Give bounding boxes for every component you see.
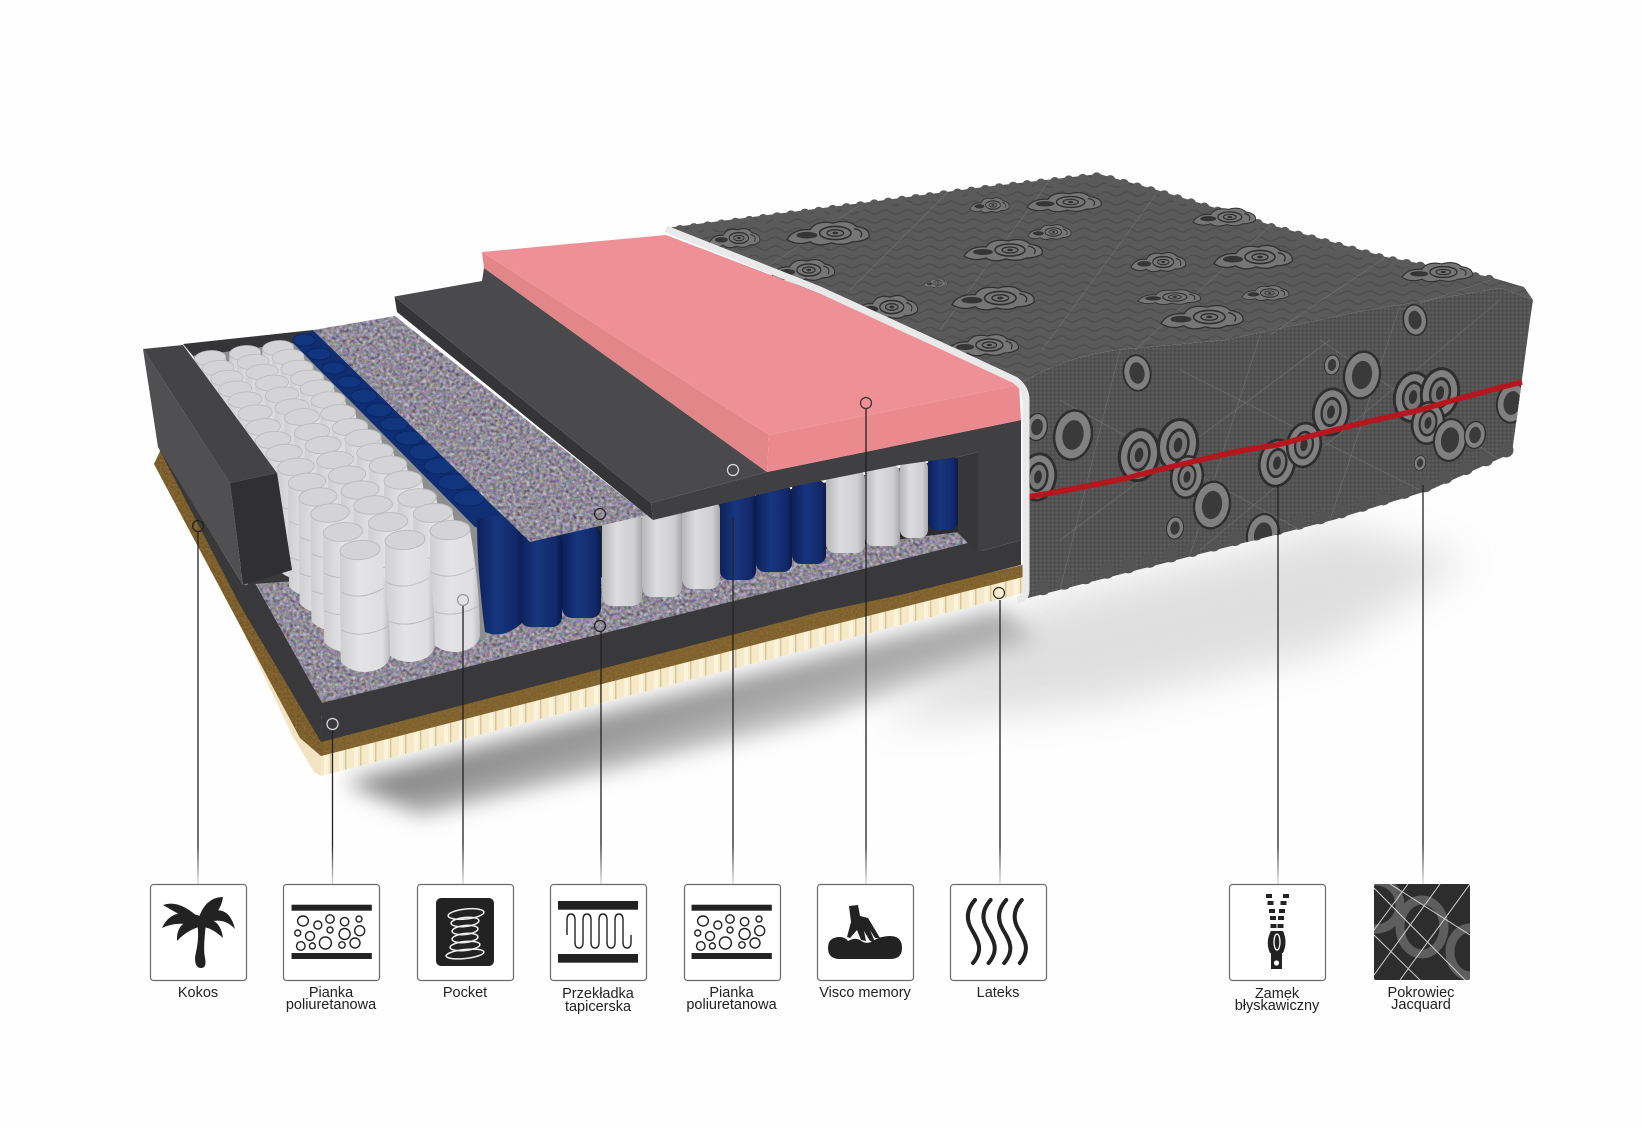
icon: jacquard swatch bbox=[1374, 884, 1470, 980]
pocket springs (front row) bbox=[477, 455, 958, 634]
latex layer bbox=[214, 570, 1023, 776]
card: Visco memory: Visco memory bbox=[819, 985, 912, 1001]
card: Przekładka tapicerska bbox=[550, 884, 646, 1015]
icon: palm tree bbox=[162, 897, 235, 968]
callout lines and markers bbox=[192, 398, 1423, 884]
cover quilting lines bbox=[770, 180, 1500, 590]
felt underlay bbox=[240, 522, 985, 716]
card: Pokrowiec Jacquard: Pokrowiec bbox=[1388, 985, 1454, 1001]
card: Przekładka tapicerska: tapicerska bbox=[565, 999, 632, 1015]
mattress illustration bbox=[143, 174, 1533, 776]
upper polyurethane foam slab bbox=[394, 268, 1021, 552]
floor shadow bbox=[345, 525, 1470, 815]
card: Pianka poliuretanowa: poliuretanowa bbox=[286, 997, 377, 1013]
icon: foam bubbles bbox=[692, 905, 772, 959]
card: Pianka poliuretanowa (upper): Pianka bbox=[709, 985, 755, 1001]
blue pocket band bbox=[293, 330, 530, 542]
pocket springs (grey, side rows) bbox=[194, 340, 480, 672]
card: Pokrowiec Jacquard bbox=[1374, 884, 1470, 1012]
jacquard cover bbox=[666, 174, 1533, 598]
card: Kokos bbox=[150, 884, 246, 1001]
icon: latex waves bbox=[968, 900, 1026, 963]
left foam bar bbox=[143, 345, 322, 742]
back frame bbox=[183, 330, 313, 356]
card: Pianka poliuretanowa (upper): poliuretanowa bbox=[686, 997, 778, 1013]
card: Pianka poliuretanowa: Pianka bbox=[309, 985, 354, 1001]
card: Zamek błyskawiczny: Zamek bbox=[1255, 986, 1300, 1002]
white zipper edge bbox=[666, 229, 1026, 600]
card: Przekładka tapicerska: Przekładka bbox=[562, 986, 635, 1002]
bottom felt layer bbox=[254, 532, 968, 703]
icon: pocket spring bbox=[436, 898, 494, 966]
card: Visco memory bbox=[818, 884, 914, 1001]
cavity back bbox=[500, 457, 958, 590]
icon: felt spacer bbox=[558, 901, 638, 963]
card: Pokrowiec Jacquard: Jacquard bbox=[1391, 997, 1451, 1013]
card: Pianka poliuretanowa (upper) bbox=[684, 884, 780, 1013]
coconut layer bbox=[154, 447, 1023, 756]
card: Kokos: Kokos bbox=[178, 985, 218, 1001]
side motifs bbox=[1030, 304, 1522, 542]
card: Pocket bbox=[418, 884, 514, 1001]
card: Zamek błyskawiczny bbox=[1230, 884, 1326, 1014]
upper felt layer bbox=[313, 316, 647, 542]
card: Zamek błyskawiczny: błyskawiczny bbox=[1235, 998, 1320, 1014]
spring bed underlay bbox=[193, 343, 530, 650]
icon: hand on memory foam bbox=[828, 905, 902, 959]
card: Lateks bbox=[950, 884, 1046, 1001]
icon: foam bubbles bbox=[292, 905, 372, 959]
card: Pocket: Pocket bbox=[443, 985, 487, 1001]
card: Lateks: Lateks bbox=[977, 985, 1019, 1001]
icon: zipper bbox=[1266, 894, 1289, 969]
card: Pianka poliuretanowa bbox=[284, 884, 380, 1013]
visco memory foam slab bbox=[482, 235, 1021, 472]
top motifs bbox=[709, 193, 1472, 356]
right foam bar bbox=[958, 452, 978, 552]
base foam strip bbox=[321, 540, 1021, 742]
red piping bbox=[1028, 382, 1522, 497]
infographic: mattress cross-section bbox=[143, 172, 1533, 1014]
